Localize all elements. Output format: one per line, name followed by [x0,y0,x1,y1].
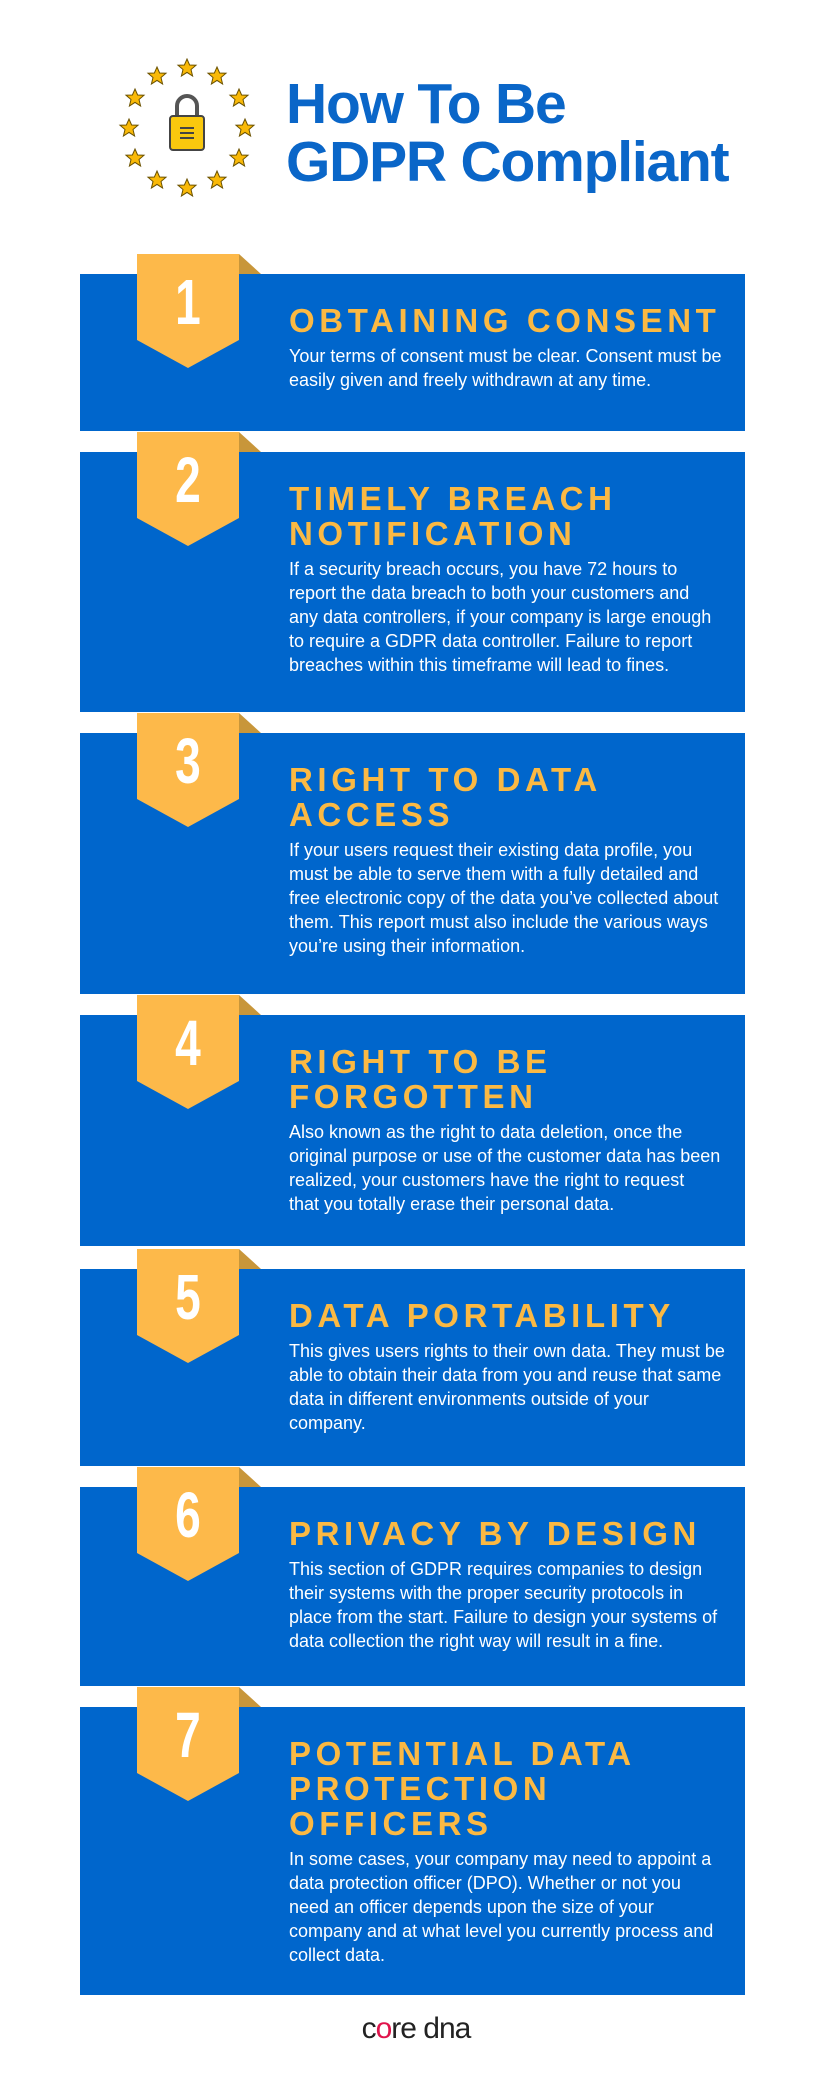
panel: 2 timely breach notification: breaches within this timeframe will lead to fines. [289,655,669,675]
panel: 1 obtaining consent: OBTAINING CONSENT [289,302,720,339]
panel: 4 right to be forgotten: 4 [175,1007,201,1079]
panel: 5 data portability: data in different environments outside of your [289,1389,649,1409]
panel: 7 potential data protection officers: PROTECTION [289,1770,551,1807]
panel: 6 privacy by design: place from the start. Failure to design your systems of [289,1607,717,1627]
panel: 7 potential data protection officers: data protection officer (DPO). Whether or not you [289,1873,681,1893]
panel: 6 privacy by design: 6 [175,1479,201,1551]
panel: 4 right to be forgotten: FORGOTTEN [289,1078,538,1115]
panel: 2 timely breach notification: NOTIFICATION [289,515,576,552]
panel: 5 data portability: company. [289,1413,366,1433]
panel: 6 privacy by design: their systems with the proper security protocols in [289,1583,683,1603]
panel: 4 right to be forgotten: RIGHT TO BE [289,1043,552,1080]
panel: 7 potential data protection officers: 7 [175,1699,201,1771]
panel: 2 timely breach notification: 2 [175,444,201,516]
panel: 3 right to data access: 3 [175,725,201,797]
panel: 3 right to data access: free electronic copy of the data you’ve collected about [289,888,718,908]
panel: 2 timely breach notification: If a security breach occurs, you have 72 hours to [289,559,677,579]
panel: 1 obtaining consent [80,274,745,431]
panel: 3 right to data access: you’re using their information. [289,936,525,956]
panel: 4 right to be forgotten: Also known as the right to data deletion, once the [289,1122,682,1142]
panel: 4 right to be forgotten: original purpose or use of the customer data has been [289,1146,720,1166]
panel: 4 right to be forgotten: that you totally erase their personal data. [289,1194,614,1214]
panel: 7 potential data protection officers: OFFICERS [289,1805,493,1842]
panel: 3 right to data access [80,733,745,994]
panel: 1 obtaining consent: Your terms of consent must be clear. Consent must be [289,346,722,366]
panel: 5 data portability: DATA PORTABILITY [289,1297,675,1334]
title: GDPR Compliant [286,130,728,194]
panel: 7 potential data protection officers: need an officer depends upon the size of your [289,1897,654,1917]
panel: 1 obtaining consent: 1 [175,266,201,338]
panel: 1 obtaining consent: easily given and freely withdrawn at any time. [289,370,651,390]
panel: 6 privacy by design [80,1487,745,1686]
panel: 2 timely breach notification: any data controllers, if your company is large enough [289,607,711,627]
panel: 7 potential data protection officers: company and at what level you currently process and [289,1921,713,1941]
panel: 5 data portability: 5 [175,1261,201,1333]
panel: 3 right to data access: them. This report must also include the various ways [289,912,708,932]
panel: 2 timely breach notification: TIMELY BREACH [289,480,617,517]
panel: 3 right to data access: ACCESS [289,796,454,833]
panel: 3 right to data access: must be able to serve them with a fully detailed and [289,864,698,884]
panel: 3 right to data access: If your users request their existing data profile, you [289,840,692,860]
icon: lock with star ring [118,58,256,198]
panel: 6 privacy by design: This section of GDPR requires companies to design [289,1559,702,1579]
panel: 5 data portability [80,1269,745,1466]
title: How To Be [286,72,565,136]
panel: 6 privacy by design: PRIVACY BY DESIGN [289,1515,701,1552]
panel: 7 potential data protection officers: POTENTIAL DATA [289,1735,636,1772]
panel: 5 data portability: able to obtain their data from you and reuse that same [289,1365,721,1385]
panel: 7 potential data protection officers [80,1707,745,1995]
panel: 4 right to be forgotten: realized, your customers have the right to request [289,1170,684,1190]
panel: 5 data portability: This gives users rights to their own data. They must be [289,1341,725,1361]
panel: 4 right to be forgotten [80,1015,745,1246]
title [286,72,729,194]
logo: core dna: core dna [362,2012,470,2045]
panel: 7 potential data protection officers: In some cases, your company may need to appoint a [289,1849,711,1869]
panel: 3 right to data access: RIGHT TO DATA [289,761,602,798]
panel: 2 timely breach notification: to require a GDPR data controller. Failure to report [289,631,692,651]
panel: 2 timely breach notification [80,452,745,712]
panel: 7 potential data protection officers: collect data. [289,1945,385,1965]
panel: 2 timely breach notification: report the data breach to both your customers and [289,583,689,603]
panel: 6 privacy by design: data collection the right way will result in a fine. [289,1631,663,1651]
